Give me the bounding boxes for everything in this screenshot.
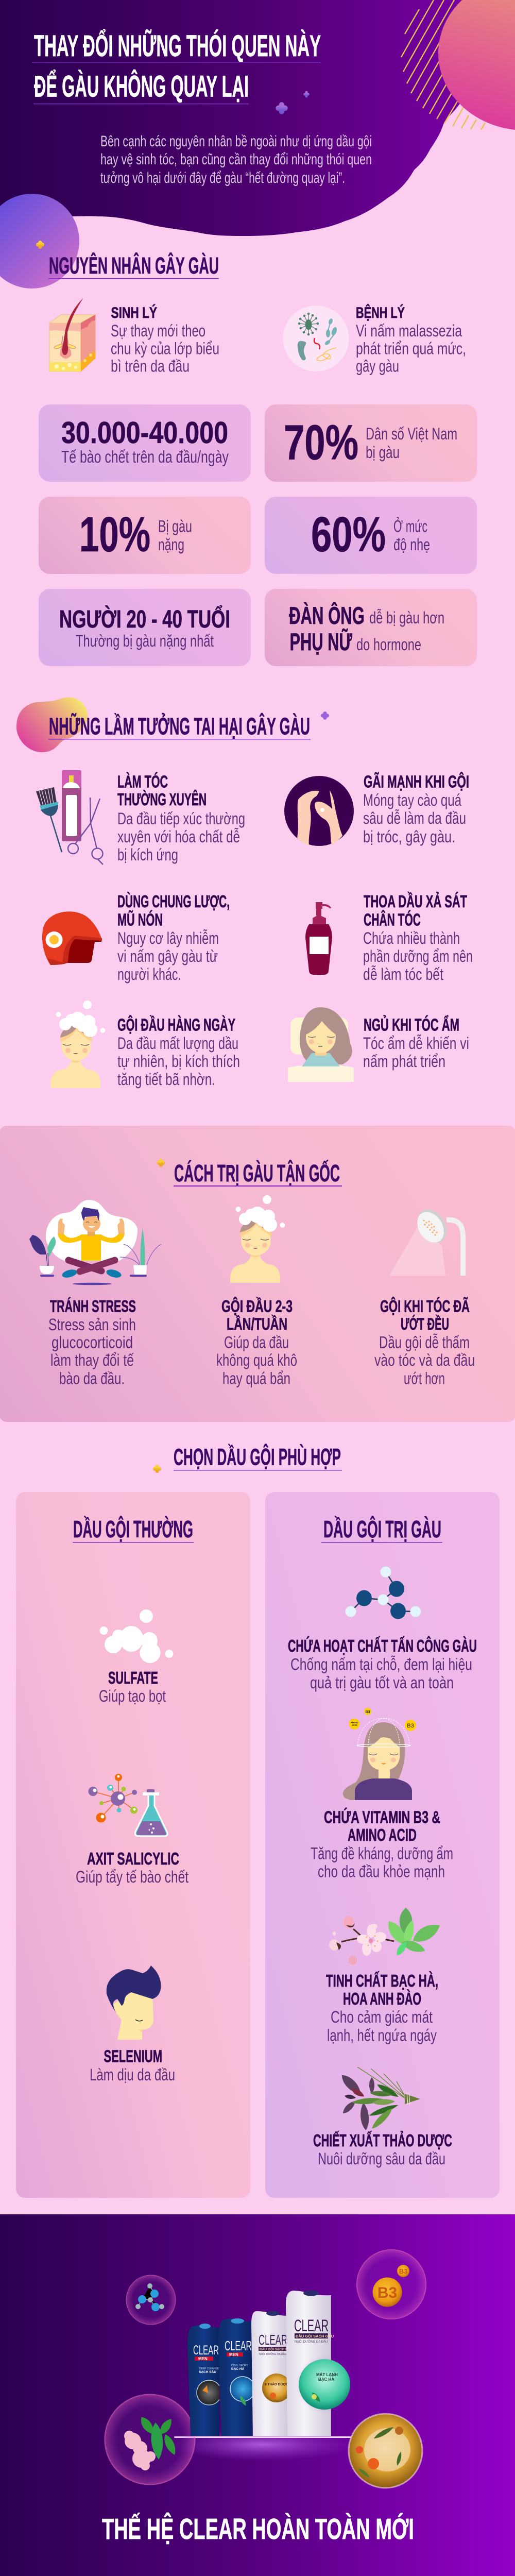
text: ngu khi toc am: Tóc ẩm dễ khiến vi bbox=[363, 1034, 469, 1053]
icon: purple sparkle bbox=[321, 711, 329, 720]
product: white bottle herbal: CLEAR bbox=[259, 2332, 287, 2348]
text: wet hair: Dầu gội dễ thấm bbox=[379, 1333, 470, 1352]
product: white bottle herbal: ĐẦU GỘI SẠCH GÀU bbox=[260, 2346, 293, 2351]
icon: woman with vitamins bbox=[343, 1708, 416, 1800]
panel: anti-dandruff shampoo bbox=[265, 1492, 500, 2198]
stat card: 10 percent: 10% bbox=[79, 507, 150, 562]
panel: treatments bbox=[0, 1126, 515, 1422]
icon: woman with vitamins: B3 bbox=[407, 1723, 414, 1729]
text: dung chung: MŨ NÓN bbox=[117, 910, 163, 929]
text: wet hair: ướt hơn bbox=[404, 1369, 445, 1388]
icon: woman with vitamins: B3 bbox=[366, 1710, 370, 1714]
stat card: gender: do hormone bbox=[356, 635, 421, 654]
icon: yellow sparkle bbox=[157, 1159, 165, 1167]
text: gai manh: bị tróc, gây gàu. bbox=[363, 827, 455, 846]
product: blue bottle cool sport: MEN bbox=[229, 2352, 238, 2357]
text: goi dau hang ngay: GỘI ĐẦU HÀNG NGÀY bbox=[117, 1015, 235, 1035]
icon: woman with vitamins: ACID bbox=[351, 1724, 357, 1726]
icon: vitamin b3 bubble bbox=[356, 2249, 426, 2319]
text: selenium bbox=[90, 2046, 175, 2084]
header wave panel bbox=[0, 0, 515, 236]
stat card: 70 percent: Dân số Việt Nam bbox=[366, 425, 457, 443]
title bbox=[32, 29, 321, 104]
text: vitamin b3 bbox=[311, 1807, 453, 1880]
icon: conditioner bottle bbox=[305, 902, 332, 975]
heading: causes: NGUYÊN NHÂN GÂY GÀU bbox=[49, 252, 219, 279]
stat card: 70 percent: bị gàu bbox=[366, 443, 400, 462]
stat card: 10 percent bbox=[39, 497, 251, 574]
icon: hair dye tools bbox=[36, 770, 103, 865]
text: vitamin b3: Tăng đề kháng, dưỡng ẩm bbox=[311, 1844, 453, 1863]
text: gai manh: GÃI MẠNH KHI GỘI bbox=[364, 772, 469, 791]
icon: molecule bbox=[345, 1566, 421, 1619]
stat card: 60 percent: độ nhẹ bbox=[393, 535, 430, 554]
text: sulfate bbox=[99, 1668, 166, 1705]
stat card: gender: ĐÀN ÔNG bbox=[289, 602, 365, 629]
heading: myths: NHỮNG LẦM TƯỞNG TAI HẠI GÂY GÀU bbox=[49, 713, 310, 740]
text: lam toc: bị kích ứng bbox=[117, 845, 178, 864]
text: wash 2-3 times: LẦN/TUẦN bbox=[227, 1315, 287, 1333]
icon: man head bbox=[107, 1965, 161, 2040]
icon: herbal gold bubble bbox=[349, 2414, 422, 2488]
icon: cherry blossom and mint bbox=[329, 1908, 443, 1965]
stat card: age: NGƯỜI 20 - 40 TUỔI bbox=[59, 605, 230, 633]
icon: woman sleeping bbox=[288, 1007, 354, 1082]
text: lam toc bbox=[117, 772, 245, 864]
text: mint and blossom: Cho cảm giác mát bbox=[331, 2008, 433, 2026]
stat card: 70 percent bbox=[265, 404, 477, 482]
stat card: age: Thường bị gàu nặng nhất bbox=[76, 632, 214, 650]
text: goi dau hang ngay: Da đầu mất lượng dầu bbox=[117, 1034, 238, 1053]
product: blue bottle deep cleanse: MEN bbox=[198, 2357, 208, 2361]
text: sinh ly bbox=[111, 304, 219, 375]
heading: choose shampoo: CHỌN DẦU GỘI PHÙ HỢP bbox=[174, 1444, 341, 1470]
text: benh ly: BỆNH LÝ bbox=[356, 304, 405, 321]
intro paragraph: Bên cạnh các nguyên nhân bề ngoài như dị ứng dầu gội bbox=[100, 133, 372, 150]
icon: yellow sparkle bbox=[153, 1465, 161, 1473]
stat card: gender: PHỤ NỮ bbox=[289, 628, 352, 655]
text: sulfate: Giúp tạo bọt bbox=[99, 1687, 166, 1705]
text: wet hair: vào tóc và da đầu bbox=[374, 1351, 475, 1369]
text: goi dau hang ngay bbox=[117, 1015, 240, 1089]
text: salicylic acid: Giúp tẩy tế bào chết bbox=[76, 1868, 188, 1886]
text: dung chung: DÙNG CHUNG LƯỢC, bbox=[117, 892, 230, 911]
text: mint and blossom: lạnh, hết ngứa ngáy bbox=[327, 2026, 437, 2044]
decorative blue circle bbox=[0, 194, 79, 289]
product: blue bottle cool sport: CLEAR bbox=[225, 2338, 252, 2353]
stat card: 60 percent: Ở mức bbox=[393, 517, 427, 536]
stat card: 70 percent: 70% bbox=[284, 415, 358, 470]
text: lam toc: LÀM TÓC bbox=[117, 772, 168, 791]
icon: flower bubble bbox=[104, 2394, 196, 2485]
product: blue bottle deep cleanse: SẠCH SÂU bbox=[199, 2369, 216, 2374]
intro paragraph: hay vệ sinh tóc, bạn cũng cần thay đổi những thói quen bbox=[100, 151, 372, 168]
text: thoa dau xa: CHÂN TÓC bbox=[364, 910, 421, 929]
text: sinh ly: chu kỳ của lớp biểu bbox=[111, 339, 219, 358]
text: herbal extract: Nuôi dưỡng sâu da đầu bbox=[318, 2149, 445, 2168]
text: wash 2-3 times: Giúp da đầu bbox=[224, 1333, 289, 1352]
text: goi dau hang ngay: tăng tiết bã nhờn. bbox=[117, 1070, 215, 1089]
text: avoid stress: Stress sản sinh bbox=[48, 1315, 136, 1334]
icon: vitamin b3 bubble: B3 bbox=[399, 2267, 407, 2275]
stat card: 10 percent: nặng bbox=[158, 535, 184, 554]
text: gai manh: Móng tay cào quá bbox=[363, 791, 461, 809]
stat card: 60 percent: 60% bbox=[311, 507, 386, 562]
icon: meditating man bbox=[29, 1200, 161, 1285]
text: vitamin b3: cho da đầu khỏe mạnh bbox=[318, 1862, 445, 1880]
icon: purple sparkle small bbox=[303, 91, 310, 97]
intro paragraph: tưởng vô hại dưới đây để gàu “hết đường quay lại”. bbox=[100, 170, 345, 187]
text: wet hair: ƯỚT ĐỀU bbox=[401, 1315, 449, 1333]
text: vitamin b3: CHỨA VITAMIN B3 & bbox=[324, 1807, 440, 1827]
text: ngu khi toc am: nấm phát triển bbox=[363, 1052, 445, 1071]
icon: herbal bundle bbox=[338, 2067, 420, 2131]
text: lam toc: THƯỜNG XUYÊN bbox=[117, 790, 207, 809]
text: mint and blossom bbox=[326, 1971, 438, 2044]
icon: molecule bubble bbox=[126, 2275, 176, 2325]
icon: mint bubble: MÁT LẠNH bbox=[316, 2372, 338, 2377]
icon: woman shampooing daily bbox=[50, 1001, 105, 1088]
text: salicylic acid bbox=[76, 1849, 188, 1886]
text: wash 2-3 times bbox=[216, 1297, 297, 1388]
product: white bottle mint: ĐẦU GỘI SẠCH GÀU bbox=[296, 2333, 334, 2338]
text: wash 2-3 times: hay quá bẩn bbox=[222, 1369, 290, 1388]
text: vitamin b3: AMINO ACID bbox=[348, 1825, 417, 1844]
product: blue bottle cool sport bbox=[218, 2318, 255, 2436]
text: mint and blossom: TINH CHẤT BẠC HÀ, bbox=[326, 1971, 438, 1990]
icon: red helmet bbox=[42, 911, 102, 965]
text: active ingredients: quả trị gàu tốt và an toàn bbox=[310, 1673, 454, 1692]
icon: shower head bbox=[389, 1204, 463, 1276]
text: sulfate: SULFATE bbox=[108, 1668, 158, 1687]
text: dung chung bbox=[117, 892, 230, 984]
decorative salmon circle bbox=[438, 0, 515, 130]
heading: treatments: CÁCH TRỊ GÀU TẬN GỐC bbox=[174, 1160, 340, 1187]
platform glow bbox=[170, 2428, 355, 2461]
text: gai manh: sâu dễ làm da đầu bbox=[363, 809, 466, 827]
text: wet hair: GỘI KHI TÓC ĐÃ bbox=[380, 1297, 470, 1316]
text: sinh ly: Sự thay mới theo bbox=[111, 321, 205, 340]
panel: product footer bbox=[0, 2214, 515, 2576]
product: white bottle mint: NUÔI DƯỠNG DA ĐẦU bbox=[295, 2340, 328, 2344]
product: white bottle herbal: 9 THẢO DƯỢC bbox=[265, 2382, 288, 2386]
product: blue bottle deep cleanse: CLEAR bbox=[193, 2343, 219, 2358]
product: white bottle herbal: NUÔI DƯỠNG DA ĐẦU bbox=[259, 2352, 287, 2356]
text: avoid stress: bào da đầu. bbox=[59, 1369, 125, 1388]
stat card: 60 percent bbox=[265, 497, 477, 574]
text: lam toc: Da đầu tiếp xúc thường bbox=[117, 809, 245, 828]
text: benh ly bbox=[356, 304, 466, 375]
text: avoid stress bbox=[48, 1297, 136, 1388]
stat card: 10 percent: Bị gàu bbox=[158, 517, 192, 536]
text: dung chung: vi nấm gây gàu từ bbox=[117, 947, 218, 965]
heading: regular shampoo: DẦU GỘI THƯỜNG bbox=[73, 1516, 193, 1543]
icon: skin and hair follicle bbox=[49, 298, 95, 371]
text: avoid stress: glucocorticoid bbox=[52, 1333, 133, 1352]
text: wet hair bbox=[374, 1297, 475, 1388]
stat card: dead cells: Tế bào chết trên da đầu/ngày bbox=[61, 447, 229, 466]
product: blue bottle deep cleanse bbox=[187, 2324, 221, 2436]
text: active ingredients bbox=[288, 1636, 477, 1692]
intro paragraph bbox=[100, 133, 372, 187]
product: white bottle mint bbox=[286, 2291, 334, 2436]
panel: regular shampoo bbox=[16, 1492, 250, 2198]
icon: scratching hands bbox=[284, 776, 354, 846]
decorative gradient blob bbox=[16, 697, 88, 752]
text: wash 2-3 times: không quá khô bbox=[216, 1351, 297, 1369]
product: white bottle herbal bbox=[251, 2311, 287, 2436]
title: ĐỂ GÀU KHÔNG QUAY LẠI bbox=[34, 70, 249, 103]
stat card: age bbox=[39, 589, 251, 666]
icon: fungus and microbes bbox=[283, 306, 349, 371]
text: wash 2-3 times: GỘI ĐẦU 2-3 bbox=[221, 1297, 293, 1316]
stat card: dead cells: 30.000-40.000 bbox=[61, 416, 228, 450]
text: salicylic acid: AXIT SALICYLIC bbox=[87, 1849, 179, 1868]
text: lam toc: xuyên với hóa chất dễ bbox=[117, 827, 240, 846]
text: dung chung: Nguy cơ lây nhiễm bbox=[117, 929, 219, 947]
stat card: gender: dễ bị gàu hơn bbox=[369, 608, 444, 627]
text: thoa dau xa bbox=[363, 892, 473, 984]
icon: woman shampooing bbox=[230, 1195, 285, 1283]
text: benh ly: gây gàu bbox=[356, 357, 399, 375]
text: selenium: Làm dịu da đầu bbox=[90, 2065, 175, 2084]
text: benh ly: Vi nấm malassezia bbox=[356, 321, 462, 340]
stat card: dead cells bbox=[39, 404, 251, 482]
product: blue bottle cool sport: BẠC HÀ bbox=[231, 2366, 245, 2371]
icon: mint bubble: BẠC HÀ bbox=[318, 2377, 334, 2382]
decorative yellow stripes bbox=[401, 0, 485, 130]
icon: purple sparkle large bbox=[276, 102, 288, 114]
product: blue bottle deep cleanse: DEEP CLEANSE bbox=[199, 2367, 219, 2370]
icon: foam bbox=[100, 1609, 173, 1663]
text: thoa dau xa: phần dưỡng ẩm nên bbox=[363, 947, 473, 965]
text: ngu khi toc am bbox=[363, 1015, 469, 1071]
text: avoid stress: làm thay đổi tế bbox=[50, 1351, 134, 1369]
text: goi dau hang ngay: tự nhiên, bị kích thích bbox=[117, 1052, 240, 1071]
text: avoid stress: TRÁNH STRESS bbox=[50, 1297, 136, 1316]
icon: molecule and flask bbox=[89, 1774, 167, 1836]
text: selenium: SELENIUM bbox=[104, 2046, 162, 2066]
text: gai manh bbox=[363, 772, 469, 846]
text: thoa dau xa: Chứa nhiều thành bbox=[363, 929, 460, 947]
stat card: gender bbox=[265, 589, 477, 666]
text: mint and blossom: HOA ANH ĐÀO bbox=[343, 1989, 421, 2008]
text: thoa dau xa: dễ làm tóc bết bbox=[363, 965, 443, 984]
text: benh ly: phát triển quá mức, bbox=[356, 339, 466, 358]
text: herbal extract bbox=[313, 2131, 452, 2168]
text: dung chung: người khác. bbox=[117, 965, 181, 984]
icon: vitamin b3 bubble: B3 bbox=[377, 2284, 397, 2301]
icon: mint bubble bbox=[296, 2355, 353, 2413]
product: blue bottle cool sport: COOL SPORT bbox=[231, 2364, 248, 2367]
text: sinh ly: SINH LÝ bbox=[111, 304, 157, 321]
product: white bottle mint: CLEAR bbox=[294, 2316, 329, 2335]
icon: yellow sparkle bbox=[36, 241, 44, 249]
text: ngu khi toc am: NGỦ KHI TÓC ẨM bbox=[364, 1015, 459, 1035]
icon: woman with vitamins: AMINO bbox=[350, 1721, 358, 1724]
text: sinh ly: bì trên da đầu bbox=[111, 357, 190, 375]
